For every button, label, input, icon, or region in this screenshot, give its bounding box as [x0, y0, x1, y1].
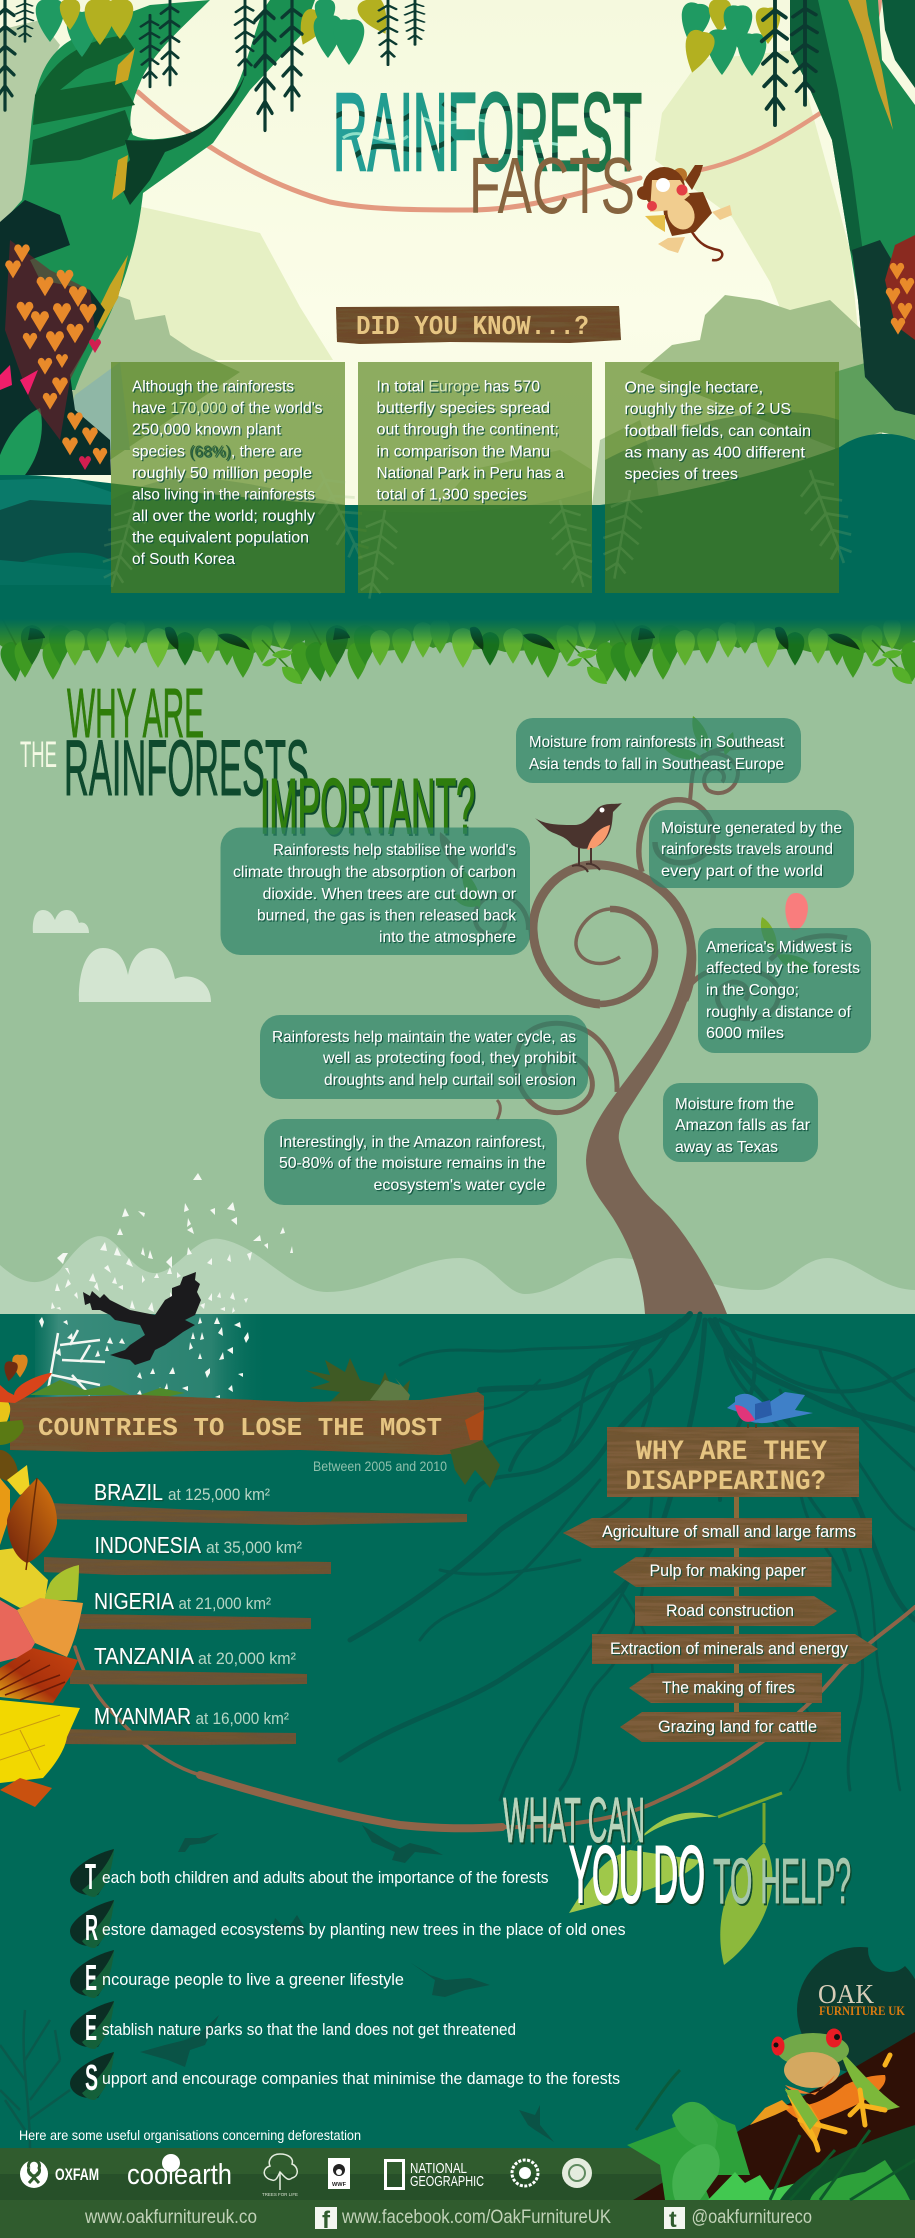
panel: butterfly fact: National Park in Peru has a [376, 465, 564, 482]
icon: monkey hanging from vine [637, 165, 732, 260]
panel: rainforest plants fact: Although the rainforests [132, 378, 294, 396]
leaf garland [0, 605, 915, 684]
icon: blue bird [727, 1392, 813, 1428]
hero scenery [0, 20, 915, 625]
panel: hectare fact [597, 362, 862, 593]
bar: Brazil: BRAZIL [94, 1479, 163, 1505]
callout: moisture travels [649, 810, 854, 888]
arrow: agriculture: Agriculture of small and large farms [602, 1523, 856, 1541]
sign: why are they disappearing: WHY ARE THEY [636, 1437, 827, 1468]
background: hero sky [0, 0, 915, 625]
panel: hectare fact: One single hectare, [624, 380, 763, 396]
callout: climate: into the atmosphere [379, 929, 516, 946]
panel: butterfly fact: out through the continent; [376, 422, 559, 438]
tree: lower left branch [516, 1023, 617, 1113]
link: facebook [315, 2207, 611, 2234]
rope: lower brown vine [75, 1607, 915, 1828]
heading: why are the rainforests important [20, 674, 475, 850]
autumn foliage [0, 240, 107, 470]
bottom orange leaf [0, 1778, 52, 1807]
panel: rainforest plants fact: the equivalent population [132, 530, 309, 546]
callout: Southeast Asia moisture [516, 718, 801, 783]
item: R: estore damaged ecosystems by planting new trees in the place of old ones [102, 1921, 626, 1939]
callout: America's Midwest: in the Congo; [706, 982, 799, 999]
link: website: www.oakfurnitureuk.co [84, 2207, 257, 2228]
arrow: grazing: Grazing land for cattle [658, 1718, 817, 1736]
panel: rainforest plants fact: of South Korea [132, 551, 235, 568]
bar: Myanmar [64, 1703, 296, 1745]
panel: butterfly fact [352, 362, 601, 602]
note: useful organisations: Here are some useful organisations concerning deforestation [19, 2127, 361, 2143]
bar: Brazil: at 125,000 km² [168, 1485, 270, 1504]
list: TREES actions [70, 1849, 626, 2100]
callout: America's Midwest: America's Midwest is [706, 939, 852, 956]
logo: Oak Furniture UK: OAK [818, 1979, 874, 2009]
sign: why are they disappearing: DISAPPEARING? [626, 1467, 826, 1498]
callout: water cycle: well as protecting food, they prohibit [322, 1050, 577, 1067]
bar: Myanmar: MYANMAR [94, 1703, 191, 1729]
background: teal section [0, 1314, 915, 2238]
panel: hectare fact: species of trees [624, 466, 738, 483]
pink leaf [0, 1600, 35, 1662]
callout: climate: burned, the gas is then released back [257, 908, 517, 924]
tree: right branch [690, 968, 779, 1019]
panel: rainforest plants fact [94, 362, 380, 593]
logo: Oak Furniture UK [797, 1928, 915, 2073]
silhouettes: dark birds [140, 1825, 554, 2142]
bar: Brazil [50, 1479, 467, 1525]
heading word: THE: THE [20, 734, 57, 775]
illustration: raven scattering into birds [35, 1173, 293, 1409]
logo: Oxfam: OXFAM [55, 2165, 99, 2184]
bar: Tanzania: at 20,000 km² [198, 1649, 296, 1668]
callout: water cycle: droughts and help curtail soil erosion [324, 1072, 576, 1089]
callout: moisture travels: rainforests travels around [661, 841, 833, 858]
arrow: fires [629, 1673, 822, 1703]
panel: rainforest plants fact: roughly 50 million people [132, 465, 312, 482]
heading: why are the rainforests important: RAINFORESTS [64, 723, 309, 812]
item: S [70, 2052, 620, 2100]
link: facebook: f [322, 2207, 331, 2234]
callout: climate: climate through the absorption of carbon [233, 864, 516, 881]
panel: rainforest plants fact: all over the world; roughly [132, 508, 315, 525]
post [734, 1497, 739, 1742]
callout: water cycle [260, 1015, 588, 1099]
icon: brown bird [535, 803, 622, 872]
logo: WWF: WWF [332, 2182, 346, 2188]
callout: climate [220, 828, 530, 955]
callout: Amazon moisture: Moisture from the [675, 1096, 794, 1113]
bar: Nigeria [79, 1588, 311, 1630]
panel: rainforest plants fact: have 170,000 of the world's [132, 400, 322, 417]
sign: countries to lose the most log: COUNTRIES TO LOSE THE MOST [38, 1413, 442, 1443]
heading: what can you do to help: WHAT CAN [503, 1784, 645, 1856]
panel: hectare fact: as many as 400 different [624, 444, 806, 462]
bar: Nigeria: at 21,000 km² [178, 1594, 271, 1613]
item: T [70, 1849, 548, 1897]
white bare branch [48, 1330, 105, 1395]
logo: National Geographic [386, 2160, 484, 2190]
footer bands [0, 2148, 915, 2238]
link: twitter [664, 2206, 812, 2232]
panel: hectare fact: football fields, can contain [624, 423, 811, 440]
bar list: countries [44, 1479, 467, 1745]
callout: America's Midwest: 6000 miles [706, 1025, 784, 1042]
callout: climate: dioxide. When trees are cut down or [263, 886, 517, 903]
dark lower trunk [0, 200, 111, 475]
item: R [70, 1900, 626, 1948]
item: E: E [85, 1957, 97, 1998]
callout: Amazon water cycle: 50-80% of the moisture remains in the [279, 1155, 546, 1172]
panel: butterfly fact: In total Europe has 570 [376, 378, 540, 396]
bar: Indonesia [44, 1532, 331, 1575]
panel: rainforest plants fact: species (68%), there are [132, 443, 302, 460]
hills [0, 1236, 915, 1314]
callout: moisture travels: Moisture generated by the [661, 820, 842, 837]
panel: rainforest plants fact: 250,000 known plant [132, 422, 282, 438]
panel: rainforest plants fact: also living in the rainforests [132, 486, 315, 503]
logo: Trees for Life: TREES FOR LIFE [262, 2192, 298, 2197]
sign: countries to lose the most log [10, 1392, 500, 1488]
arrow: pulp [613, 1557, 832, 1587]
rope: vine across the hero [138, 0, 880, 210]
tree roots [340, 1314, 915, 1800]
footer: links [84, 2206, 812, 2234]
callout: Amazon water cycle [264, 1119, 557, 1205]
logo: Oxfam [20, 2160, 99, 2188]
pale yellow leaf [0, 1548, 48, 1608]
autumn leaves on left edge [0, 1355, 83, 1807]
right tree [790, 0, 915, 415]
illustration: curly tree [440, 716, 847, 1314]
link: facebook: www.facebook.com/OakFurnitureUK [341, 2207, 611, 2228]
arrow: extraction: Extraction of minerals and energy [610, 1640, 849, 1658]
callout: Amazon water cycle: Interestingly, in the Amazon rainforest, [279, 1134, 546, 1151]
plants [627, 2105, 750, 2200]
logo: conservation emblem [562, 2158, 592, 2188]
text: IMPORTANT? [260, 762, 475, 850]
item: T: each both children and adults about the importance of the forests [102, 1869, 548, 1887]
arrow: agriculture [563, 1518, 872, 1548]
arrow: road [635, 1596, 837, 1626]
item: S: upport and encourage companies that minimise the damage to the forests [102, 2070, 620, 2088]
clouds [33, 910, 211, 1002]
fern above log [30, 1358, 410, 1402]
arrow: pulp: Pulp for making paper [650, 1562, 806, 1580]
callout: water cycle: Rainforests help maintain the water cycle, as [272, 1029, 576, 1046]
illustration: frog on branch with plants [627, 2028, 915, 2200]
bright yellow leaf [0, 1700, 80, 1783]
callout: Southeast Asia moisture: Moisture from rainforests in Southeast [529, 734, 785, 751]
logo: National Geographic: GEOGRAPHIC [410, 2173, 484, 2190]
tree: top right branch [639, 800, 713, 872]
date note: Between 2005 and 2010 [313, 1458, 447, 1474]
item: R: R [85, 1907, 98, 1948]
link: twitter: @oakfurnitureco [692, 2207, 812, 2228]
yellow-green leaf [45, 1565, 79, 1600]
logo: Trees for Life [262, 2154, 298, 2197]
title: Rainforest Facts [333, 71, 642, 230]
ground [0, 434, 915, 625]
logo: Cool Earth: coolearth [127, 2159, 232, 2191]
callout: moisture travels: every part of the world [661, 863, 823, 880]
logo: Rainforest Concern emblem [512, 2160, 538, 2186]
logos: organisations [20, 2154, 592, 2197]
item: E: stablish nature parks so that the land does not get threatened [102, 2021, 516, 2039]
item: E: E [85, 2007, 97, 2048]
bushes [60, 293, 915, 505]
callout: America's Midwest: roughly a distance of [706, 1004, 852, 1021]
callout: Amazon moisture: Amazon falls as far [675, 1117, 811, 1134]
bar: Indonesia: INDONESIA [94, 1532, 202, 1558]
bar: Tanzania: TANZANIA [94, 1643, 195, 1669]
item: E [70, 1950, 404, 1998]
bar: Nigeria: NIGERIA [94, 1588, 175, 1614]
callout: Amazon moisture [663, 1083, 818, 1162]
callout: America's Midwest [698, 928, 871, 1053]
callout: Amazon water cycle: ecosystem's water cycle [374, 1177, 546, 1194]
bar: Myanmar: at 16,000 km² [196, 1709, 289, 1728]
illustration: big leaves [569, 1793, 782, 1965]
item: E: ncourage people to live a greener lifestyle [102, 1971, 404, 1989]
sign: why are they disappearing [607, 1427, 859, 1742]
tree: left curl in bubble [475, 895, 528, 935]
red-orange leaf [0, 1648, 78, 1703]
item: T: T [85, 1856, 96, 1897]
logo: National Geographic: NATIONAL [410, 2160, 467, 2177]
panel: hectare fact: roughly the size of 2 US [624, 401, 791, 418]
bar: Tanzania [70, 1643, 307, 1685]
brown leaf [7, 1478, 57, 1563]
panel: butterfly fact: total of 1,300 species [376, 486, 527, 503]
background: why section [0, 625, 915, 1315]
foliage and vines at the top [0, 0, 817, 130]
arrow: fires: The making of fires [662, 1679, 795, 1697]
callout: America's Midwest: affected by the forests [706, 960, 860, 977]
bar: Indonesia: at 35,000 km² [206, 1538, 302, 1557]
callout: Amazon moisture: away as Texas [675, 1139, 778, 1156]
sign: did you know: DID YOU KNOW...? [356, 313, 589, 343]
big green leaf [0, 408, 42, 475]
panel: butterfly fact: in comparison the Manu [376, 443, 550, 460]
logo: WWF [328, 2158, 350, 2189]
heading: what can you do to help [503, 1784, 851, 1920]
callout: Southeast Asia moisture: Asia tends to fall in Southeast Europe [529, 756, 784, 773]
arrow: road: Road construction [666, 1602, 794, 1620]
orange leaf [17, 1598, 83, 1657]
panel: butterfly fact: butterfly species spread [376, 400, 550, 417]
item: S: S [85, 2057, 98, 2098]
callout: climate: Rainforests help stabilise the world's [273, 842, 516, 859]
title word: FACTS: FACTS [469, 141, 635, 230]
bare tree silhouette [0, 2010, 70, 2148]
arrow: extraction [592, 1634, 878, 1664]
left tree [0, 0, 315, 475]
link: twitter: t [669, 2206, 677, 2232]
heading: why are the rainforests important: WHY ARE [67, 674, 204, 752]
signpost arrows: causes [563, 1518, 878, 1742]
item: E [70, 2001, 516, 2049]
arrow: grazing [620, 1712, 841, 1742]
heading: what can you do to help: YOU DO [569, 1830, 705, 1920]
